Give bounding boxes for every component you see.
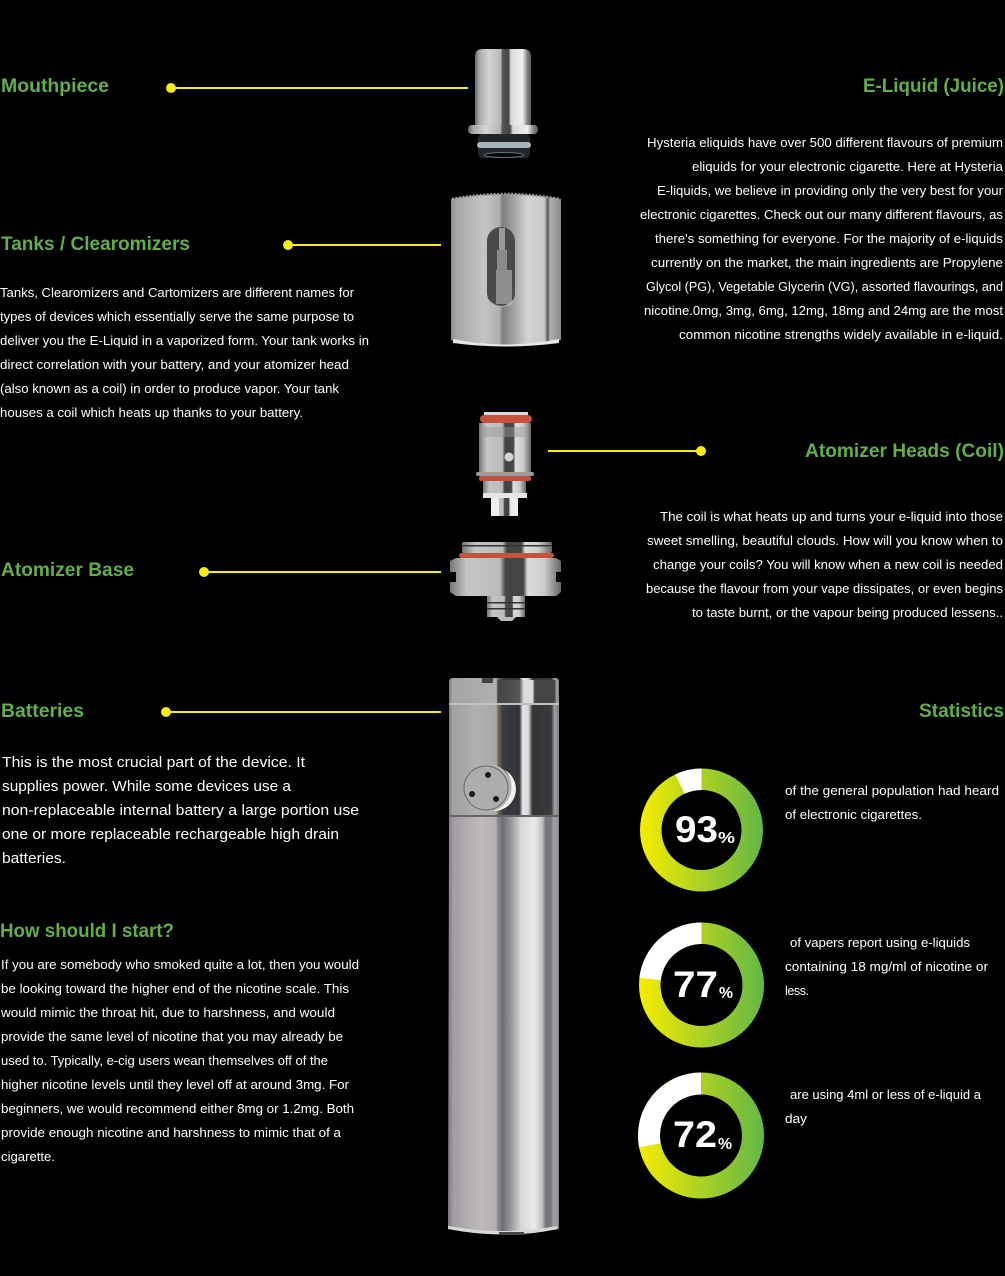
text: how to start description: be looking toward the higher end of the nicotine scale. This <box>1 982 349 996</box>
text: stat 77: of vapers report using e-liquids <box>790 936 970 950</box>
text: stat 93 <box>785 784 999 822</box>
donut chart: 77 percent <box>639 922 753 1037</box>
heading: mouthpiece: Mouthpiece <box>1 76 109 97</box>
text: tanks description: types of devices which essentially serve the same purpose to <box>0 310 354 324</box>
mouthpiece part <box>468 49 538 158</box>
donut chart: 77 percent: 77 <box>673 964 718 1005</box>
text: e-liquid description: currently on the market, the main ingredients are Propylene <box>651 256 1003 270</box>
heading: atomizer heads: Atomizer Heads (Coil) <box>805 441 1004 462</box>
text: how to start description: higher nicotine levels until they level off at around 3mg. For <box>1 1078 349 1092</box>
text: coil description: to taste burnt, or the vapour being produced lessens.. <box>692 606 1003 620</box>
text: e-liquid description: nicotine.0mg, 3mg, 6mg, 12mg, 18mg and 24mg are the most <box>644 304 1004 318</box>
text: tanks description: deliver you the E-Liquid in a vaporized form. Your tank works in <box>0 334 369 348</box>
text: batteries description: supplies power. While some devices use a <box>2 779 292 795</box>
donut chart: 72 percent: 72 <box>673 1114 717 1155</box>
text: tanks description: (also known as a coil) in order to produce vapor. Your tank <box>0 382 340 396</box>
atomizer base part <box>450 542 561 621</box>
text: how to start description: cigarette. <box>1 1150 55 1164</box>
leader: batteries <box>161 707 441 717</box>
text: coil description: because the flavour from your vape dissipates, or even begins <box>646 582 1003 596</box>
text: how to start description: If you are somebody who smoked quite a lot, then you would <box>1 958 359 972</box>
text: tanks description: Tanks, Clearomizers and Cartomizers are different names for <box>0 286 354 300</box>
text: e-liquid description: electronic cigarettes. Check out our many different flavours, as <box>640 208 1003 222</box>
text: batteries description: non-replaceable internal battery a large portion use <box>2 803 359 819</box>
text: how to start description: beginners, we would recommend either 8mg or 1.2mg. Both <box>1 1102 354 1116</box>
donut chart: 72 percent <box>638 1072 753 1188</box>
text: coil description: change your coils? You will know when a new coil is needed <box>653 558 1003 572</box>
text: tanks description: houses a coil which heats up thanks to your battery. <box>0 406 303 420</box>
text: e-liquid description: E-liquids, we believe in providing only the very best for your <box>657 184 1003 198</box>
text: tanks description: direct correlation with your battery, and your atomizer head <box>0 358 349 372</box>
text: stat 77: less. <box>785 984 809 998</box>
text: e-liquid description <box>640 136 1004 342</box>
text: coil description: sweet smelling, beautiful clouds. How will you know when to <box>647 534 1003 548</box>
text: e-liquid description: eliquids for your electronic cigarette. Here at Hysteria <box>692 160 1003 174</box>
coil part <box>476 412 534 516</box>
text: how to start description: would mimic the throat hit, due to harshness, and would <box>0 1006 335 1020</box>
donut chart: 93 percent: 93 <box>675 809 718 850</box>
donut chart: 77 percent: % <box>719 985 733 1002</box>
battery button <box>464 764 516 812</box>
panel: atomizer heads <box>646 441 1004 620</box>
text: batteries description: batteries. <box>2 851 66 867</box>
panel: how should I start <box>0 921 359 1164</box>
battery part <box>448 678 559 1235</box>
panel: e-liquid <box>640 76 1004 342</box>
text: stat 72 <box>785 1088 981 1126</box>
text: e-liquid description: common nicotine strengths widely available in e-liquid. <box>679 328 1003 342</box>
text: how to start description: provide the same level of nicotine that you may already be <box>1 1030 343 1044</box>
text: stat 93: of electronic cigarettes. <box>785 808 922 822</box>
text: stat 77: containing 18 mg/ml of nicotine or <box>785 960 988 974</box>
tank part <box>451 194 561 346</box>
donut chart: 72 percent: % <box>718 1136 732 1153</box>
heading: e-liquid: E-Liquid (Juice) <box>863 76 1004 97</box>
text: e-liquid description: Glycol (PG), Vegetable Glycerin (VG), assorted flavourings, and <box>646 280 1003 294</box>
text: stat 93: of the general population had heard <box>785 784 999 798</box>
heading: atomizer base: Atomizer Base <box>1 560 134 581</box>
heading: statistics: Statistics <box>919 701 1004 722</box>
heading: how should I start: How should I start? <box>0 921 174 942</box>
heading: batteries: Batteries <box>1 701 84 722</box>
donut chart: 93 percent <box>651 768 752 881</box>
text: how to start description: used to. Typically, e-cig users wean themselves off of the <box>1 1054 328 1068</box>
leader: mouthpiece <box>166 83 468 93</box>
text: how to start description <box>0 958 359 1164</box>
text: stat 77 <box>785 936 988 998</box>
leader: tanks <box>283 240 441 250</box>
panel: tanks <box>0 234 369 420</box>
heading: tanks: Tanks / Clearomizers <box>1 234 190 255</box>
text: e-liquid description: Hysteria eliquids have over 500 different flavours of premium <box>647 136 1003 150</box>
text: stat 72: are using 4ml or less of e-liquid a <box>790 1088 981 1102</box>
donut chart: 93 percent: % <box>718 830 735 847</box>
text: tanks description <box>0 286 369 420</box>
leader: atomizer base <box>199 567 441 577</box>
text: how to start description: provide enough nicotine and harshness to mimic that of a <box>1 1126 341 1140</box>
text: e-liquid description: there's something for everyone. For the majority of e-liquids <box>655 232 1003 246</box>
text: stat 72: day <box>785 1112 808 1126</box>
text: batteries description: This is the most crucial part of the device. It <box>2 755 305 771</box>
panel: batteries <box>1 701 359 867</box>
leader: atomizer heads <box>548 446 706 456</box>
text: batteries description <box>2 755 359 867</box>
panel: statistics <box>638 701 1004 1188</box>
text: coil description <box>646 510 1003 620</box>
text: coil description: The coil is what heats up and turns your e-liquid into those <box>660 510 1003 524</box>
text: batteries description: one or more replaceable rechargeable high drain <box>2 827 339 843</box>
device: exploded vape pen <box>448 49 561 1235</box>
